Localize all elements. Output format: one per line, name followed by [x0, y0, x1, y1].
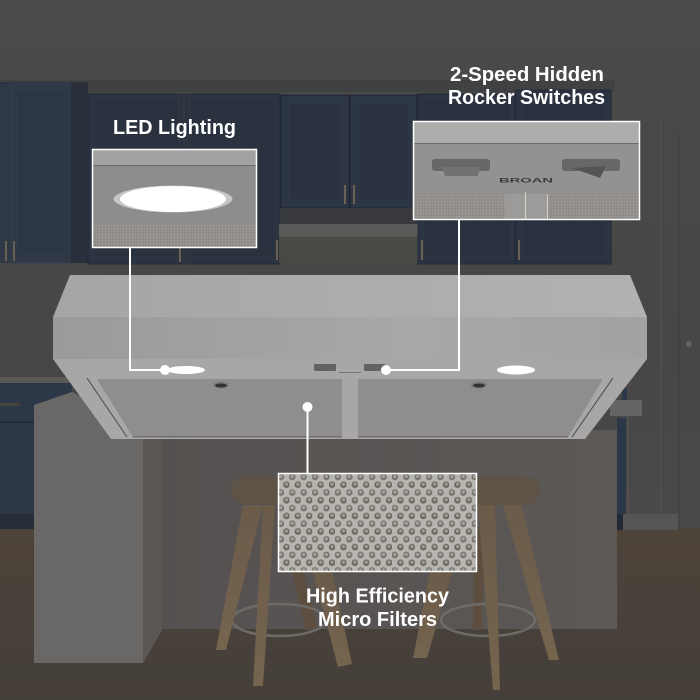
- heading: 2-Speed Hidden Rocker Switches: 2-Speed Hidden: [450, 64, 604, 86]
- filter slots: [87, 378, 613, 437]
- left filter: [97, 379, 342, 437]
- heading: 2-Speed Hidden Rocker Switches: [448, 64, 605, 109]
- range hood: [53, 275, 647, 439]
- lower cabinets and counters: [0, 377, 678, 530]
- panel: LED lighting inset: [92, 149, 257, 248]
- right filter: [358, 379, 603, 437]
- led left: [167, 366, 205, 374]
- filter texture: [413, 194, 505, 220]
- hood front panel: [53, 317, 647, 359]
- heading: High Efficiency Micro Filters: High Efficiency: [306, 586, 450, 608]
- heading: High Efficiency Micro Filters: Micro Filters: [318, 609, 437, 631]
- hood top panel: [53, 275, 647, 317]
- left rocker: [432, 159, 490, 176]
- hood underside: [53, 359, 647, 439]
- panel: rocker switches inset: [413, 121, 640, 220]
- stool: right: [413, 477, 559, 690]
- right rocker: [562, 159, 620, 178]
- vents: [213, 382, 487, 388]
- heading: LED Lighting: LED Lighting: [113, 117, 236, 139]
- switches: [314, 364, 386, 373]
- inset brand label: BROAN: [499, 178, 553, 184]
- filter bottom edge: [133, 436, 568, 438]
- callout connector lines and dots: [130, 220, 459, 473]
- upper cabinets: [0, 82, 611, 264]
- panel: micro filter inset: [278, 473, 477, 572]
- heading: 2-Speed Hidden Rocker Switches: Rocker Switches: [448, 87, 605, 109]
- stool: left: [216, 477, 352, 686]
- heading: High Efficiency Micro Filters: [306, 586, 450, 631]
- island: [34, 392, 617, 663]
- led right: [497, 366, 535, 374]
